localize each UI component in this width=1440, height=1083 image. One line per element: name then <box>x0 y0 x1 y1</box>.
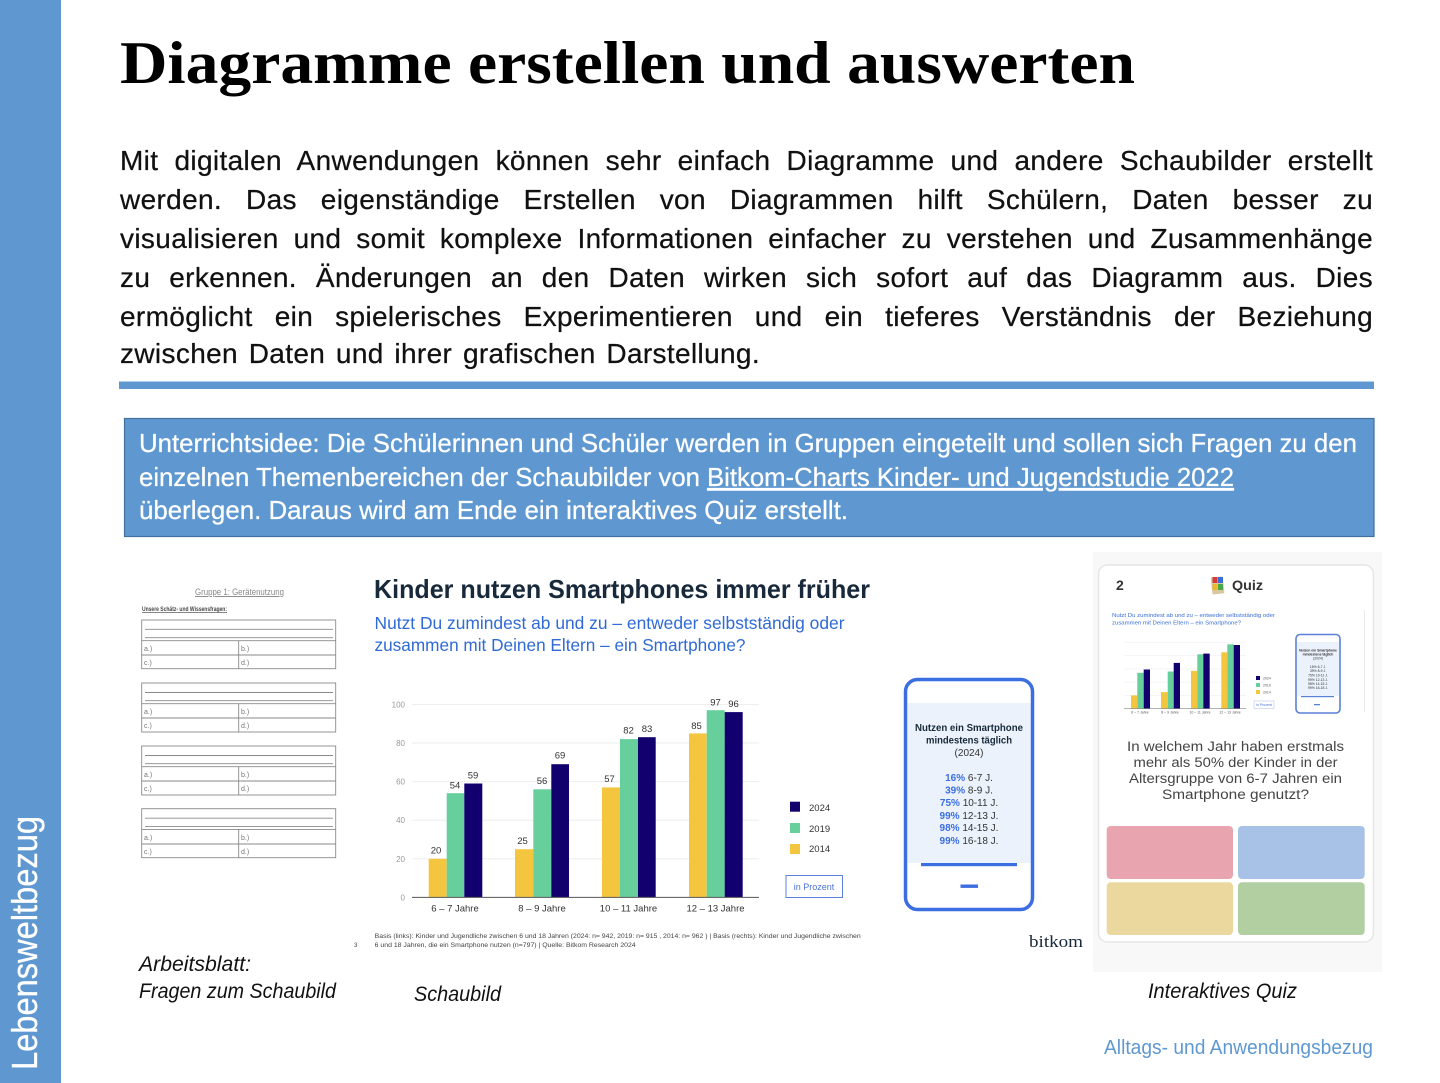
text: werden. Das eigenständige Erstellen von Diagrammen hilft Schülern, Daten besser zu <box>120 184 1373 215</box>
phone text <box>915 723 1023 847</box>
worksheet table 2: b.) <box>241 709 249 716</box>
mini chart subheading: zusammen mit Deinen Eltern – ein Smartphone? <box>1112 620 1242 626</box>
panel: worksheet <box>142 587 336 858</box>
legend: 2014 <box>809 844 830 855</box>
bar chart <box>392 698 842 914</box>
mini phone: (2024) <box>1313 656 1323 660</box>
chart source note: 6 und 18 Jahren, die ein Smartphone nutzen (n=797) | Quelle: Bitkom Research 2024 <box>375 942 636 949</box>
data labels: 83 <box>642 724 652 735</box>
data labels: 54 <box>450 780 460 792</box>
data labels: 85 <box>691 721 702 732</box>
x axis labels: 12 – 13 Jahre <box>686 904 745 914</box>
worksheet table 4: a.) <box>144 835 152 842</box>
mini phone: mindestens täglich <box>1303 652 1333 656</box>
phone text: 75% 10-11 J. <box>940 798 998 809</box>
phone text: 16% 6-7 J. <box>945 773 993 784</box>
phone graphic <box>906 680 1032 910</box>
data labels: 96 <box>728 699 739 710</box>
quiz question <box>1127 739 1344 802</box>
legend: 2019 <box>809 824 830 835</box>
mini phone <box>1296 634 1340 713</box>
callout: Unterrichtsidee: Unterrichtsidee: Die Schülerinnen und Schüler werden in Gruppen eingeteilt und sollen sich Fragen zu den <box>139 428 1357 458</box>
callout: Unterrichtsidee: Bitkom-Charts Kinder- und Jugendstudie 2022 <box>707 462 1234 492</box>
mini phone: 39% 8-9 J. <box>1310 669 1326 673</box>
x axis labels: 10 – 11 Jahre <box>600 904 657 914</box>
bar chart: 40 <box>396 816 406 825</box>
chart source note: 3 <box>354 942 358 949</box>
bar chart: 100 <box>392 700 406 710</box>
series 2024 <box>464 712 743 897</box>
chart subheading: Nutzt Du zumindest ab und zu – entweder selbstständig oder <box>374 613 845 633</box>
mini bar chart: 2024 <box>1263 676 1271 680</box>
phone text: mindestens täglich <box>926 736 1012 746</box>
worksheet table 3 <box>142 746 336 795</box>
mini bar chart: 6 – 7 Jahre <box>1131 710 1149 714</box>
phone text: Nutzen ein Smartphone <box>915 723 1023 734</box>
worksheet table 1: a.) <box>144 646 152 653</box>
data labels: 97 <box>710 698 721 708</box>
data labels: 25 <box>517 836 528 847</box>
legend <box>790 802 830 855</box>
worksheet table 2: d.) <box>241 723 249 730</box>
worksheet subheading: Unsere Schätz- und Wissensfragen: <box>142 606 227 613</box>
quiz question: Altersgruppe von 6-7 Jahren ein <box>1129 771 1342 786</box>
worksheet table 3: a.) <box>144 772 152 779</box>
bitkom logo: bitkom <box>1029 932 1083 951</box>
worksheet table 4: b.) <box>241 835 249 842</box>
unit label: in Prozent <box>794 882 835 892</box>
series 2019 <box>447 710 725 897</box>
data labels: 56 <box>537 776 547 787</box>
chart subheading <box>374 613 845 655</box>
text: Mit digitalen Anwendungen können sehr einfach Diagramme und andere Schaubilder erstellt <box>120 145 1373 176</box>
mini phone: 16% 6-7 J. <box>1310 665 1326 669</box>
mini bar chart: 12 – 13 Jahre <box>1219 710 1241 714</box>
icon: quiz logo <box>1211 576 1224 595</box>
data labels: 59 <box>468 770 478 782</box>
mini phone: 99% 16-18 J. <box>1308 686 1328 690</box>
worksheet table 4: c.) <box>144 849 152 856</box>
mini bar chart <box>1124 642 1274 714</box>
divider rule <box>119 382 1374 389</box>
chart subheading: zusammen mit Deinen Eltern – ein Smartphone? <box>374 635 746 655</box>
mini bar chart: in Prozent <box>1256 703 1272 707</box>
callout: Unterrichtsidee: überlegen. Daraus wird am Ende ein interaktives Quiz erstellt. <box>139 495 848 525</box>
callout: Unterrichtsidee <box>124 418 1374 536</box>
text: ermöglicht ein spielerisches Experimentieren und ein tieferes Verständnis der Beziehung <box>120 301 1373 332</box>
phone text: 39% 8-9 J. <box>945 786 993 796</box>
title: Diagramme erstellen und auswerten <box>120 30 1135 96</box>
mini bar chart: 10 – 11 Jahre <box>1189 710 1211 714</box>
worksheet table 3: b.) <box>241 772 249 779</box>
quiz number: 2 <box>1116 577 1124 593</box>
worksheet table 1: d.) <box>241 660 249 667</box>
chart heading: Kinder nutzen Smartphones immer früher <box>374 574 870 604</box>
footer label: Alltags- und Anwendungsbezug <box>1104 1037 1373 1059</box>
chart source note: Basis (links): Kinder und Jugendliche zwischen 6 und 18 Jahren (2024: n= 942, 2019: n= 915 , 2014: n= 962 ) | Basis (rechts): Kinder und Jugendliche zwischen <box>375 933 861 940</box>
quiz label: Quiz <box>1232 577 1263 593</box>
text: zu erkennen. Änderungen an den Daten wirken sich sofort auf das Diagramm aus. Dies <box>120 262 1373 293</box>
mini chart subheading <box>1112 613 1275 626</box>
mini chart subheading: Nutzt Du zumindest ab und zu – entweder selbstständig oder <box>1112 613 1275 619</box>
text: visualisieren und somit komplexe Informationen einfacher zu verstehen und Zusammenhänge <box>120 223 1373 254</box>
bar chart: 60 <box>396 778 406 787</box>
data labels: 57 <box>604 774 615 785</box>
x axis labels: 6 – 7 Jahre <box>431 904 479 914</box>
series 2014 <box>429 733 707 897</box>
phone text: 99% 12-13 J. <box>940 811 998 822</box>
caption: Arbeitsblatt <box>137 953 337 1003</box>
mini bar chart: 8 – 9 Jahre <box>1161 710 1179 714</box>
panel: quiz <box>1093 552 1382 972</box>
text: zwischen Daten und ihrer grafischen Darstellung. <box>120 338 760 369</box>
worksheet table 2: a.) <box>144 709 152 716</box>
worksheet table 2: c.) <box>144 723 152 730</box>
mini phone: Nutzen ein Smartphone <box>1299 648 1337 652</box>
phone text: (2024) <box>955 748 983 759</box>
mini bar chart: 2014 <box>1263 690 1271 694</box>
bar chart: 0 <box>401 893 406 902</box>
sidebar: Lebensweltbezug <box>0 0 61 1083</box>
worksheet heading: Gruppe 1: Gerätenutzung <box>195 587 284 598</box>
worksheet table 3: c.) <box>144 786 152 793</box>
bar chart: 20 <box>396 855 406 864</box>
chart source note <box>354 933 861 949</box>
quiz question: Smartphone genutzt? <box>1162 787 1309 802</box>
worksheet table 3: d.) <box>241 786 249 793</box>
callout: Unterrichtsidee: einzelnen Themenbereichen der Schaubilder von <box>139 462 700 492</box>
worksheet table 2 <box>142 683 336 732</box>
answer tiles <box>1107 826 1365 935</box>
bar chart: 80 <box>396 739 406 748</box>
worksheet table 1: c.) <box>144 660 152 667</box>
quiz question: In welchem Jahr haben erstmals <box>1127 739 1344 754</box>
x axis labels <box>431 904 745 914</box>
unit label <box>786 876 842 898</box>
caption: Schaubild: Schaubild <box>414 983 502 1006</box>
data labels: 20 <box>431 846 441 856</box>
intro paragraph <box>120 145 1373 370</box>
caption: Arbeitsblatt: Arbeitsblatt: <box>137 953 251 976</box>
phone text: 98% 14-15 J. <box>940 823 998 834</box>
sidebar: Lebensweltbezug: Lebensweltbezug <box>4 816 45 1070</box>
mini bar chart: 2019 <box>1263 684 1271 688</box>
caption: Arbeitsblatt: Fragen zum Schaubild <box>139 980 337 1003</box>
legend: 2024 <box>809 803 830 814</box>
worksheet table 4 <box>142 809 336 858</box>
data labels: 69 <box>555 750 565 762</box>
caption: Interaktives Quiz: Interaktives Quiz <box>1148 980 1297 1003</box>
phone text: 99% 16-18 J. <box>940 836 998 847</box>
worksheet table 1: b.) <box>241 646 249 653</box>
data labels: 82 <box>623 726 634 736</box>
data labels <box>431 698 739 856</box>
mini phone: 99% 12-13 J. <box>1308 678 1328 682</box>
quiz question: mehr als 50% der Kinder in der <box>1134 755 1338 770</box>
x axis labels: 8 – 9 Jahre <box>518 904 566 914</box>
worksheet table 4: d.) <box>241 849 249 856</box>
mini phone: 98% 14-15 J. <box>1308 682 1328 686</box>
mini phone: 75% 10-11 J. <box>1308 674 1328 678</box>
worksheet table 1 <box>142 620 336 669</box>
